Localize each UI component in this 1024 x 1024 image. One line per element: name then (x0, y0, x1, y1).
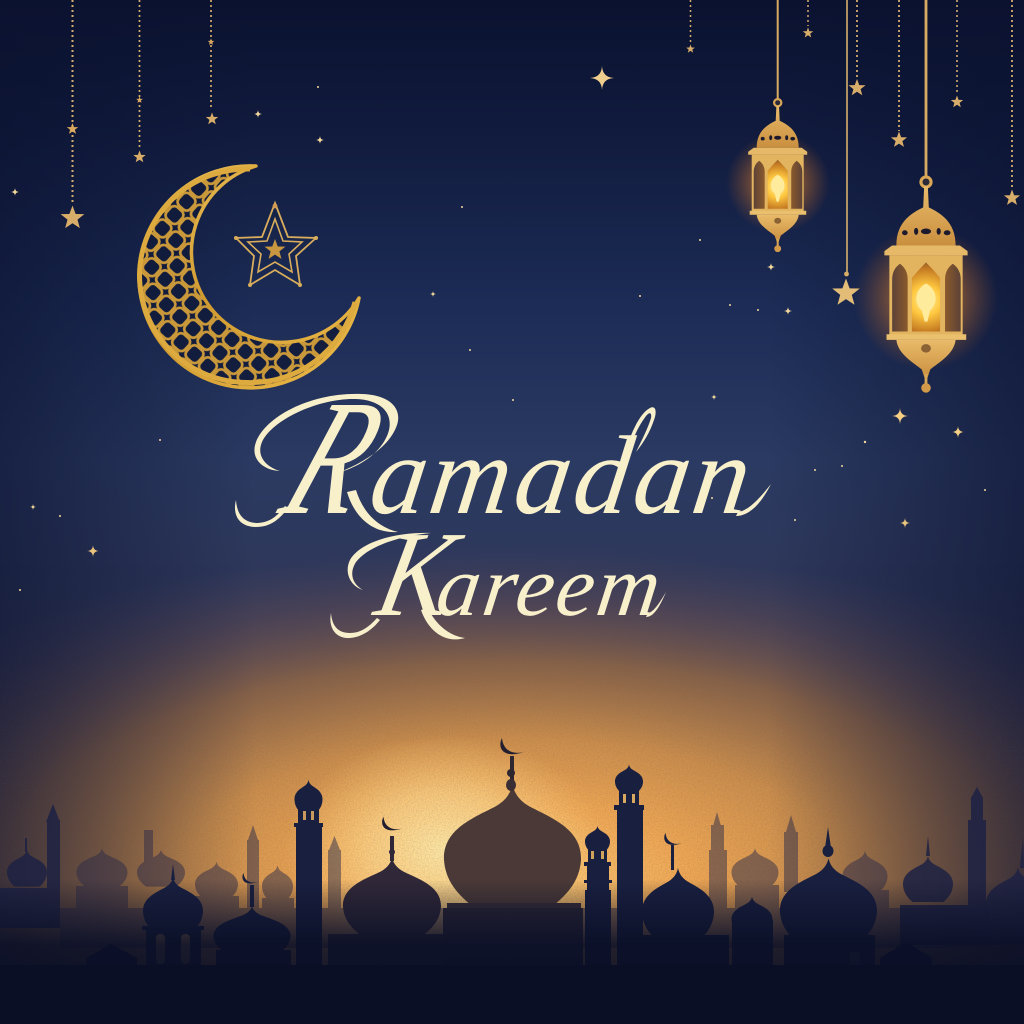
icon: geometric star beside crescent (234, 203, 318, 287)
hanging stars: right group (686, 0, 1020, 305)
hanging stars: left group (61, 0, 218, 228)
dome: large right dome with finial (780, 827, 877, 975)
skyline: distant hazy mosques (60, 812, 990, 948)
skyline: middle-distance domes and minarets (0, 787, 1024, 945)
dome: crescent-topped centre left (328, 817, 458, 974)
title line: Ramadan: amadan (364, 414, 759, 538)
minaret: tall centre-right tower (614, 765, 644, 974)
title: Ramadan Kareem (235, 367, 771, 642)
icon: golden lattice crescent moon (139, 166, 359, 388)
minaret: tall left tower (294, 780, 323, 970)
minaret: small centre tower (584, 826, 612, 975)
title line: Kareem: areem (431, 538, 667, 634)
title line: Ramadan: R (261, 367, 407, 550)
icon: large glowing lantern (854, 0, 998, 393)
small foreground huts (0, 942, 1024, 1024)
title line: Kareem: K (365, 506, 472, 642)
dome: crescent-topped right of centre (640, 833, 729, 975)
sparkling stars field (11, 66, 986, 591)
dome: crescent-topped left (213, 873, 291, 975)
dome: left drum with windows (142, 864, 204, 973)
foreground: dark ground fade (0, 880, 1024, 1024)
icon: small glowing lantern (726, 0, 830, 252)
dome: great central dome with crescent (443, 738, 583, 978)
skyline: foreground mosque silhouettes (0, 738, 1024, 1024)
dome: low rounded kiosk (731, 897, 773, 972)
title line: Kareem (330, 506, 667, 642)
title line: Ramadan (235, 367, 771, 550)
